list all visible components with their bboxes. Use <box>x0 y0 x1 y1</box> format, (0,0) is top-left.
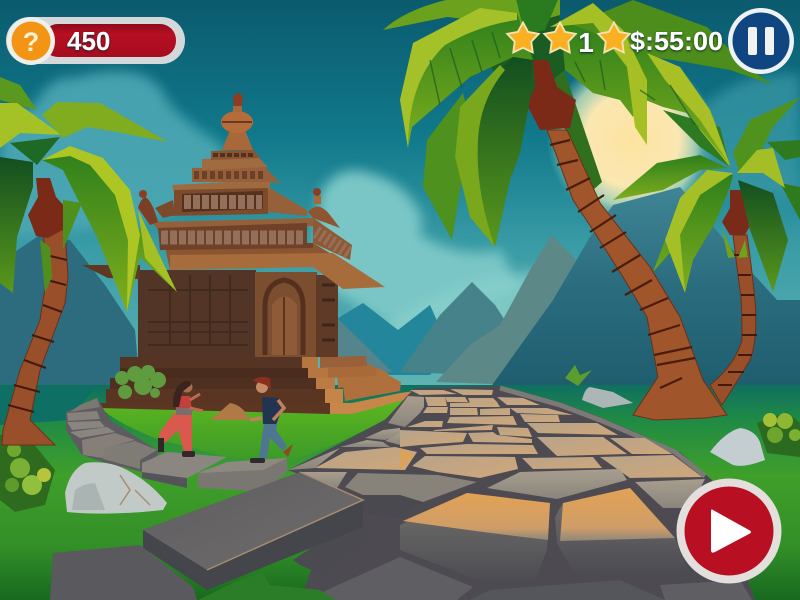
timer: $:55:00 <box>630 26 723 56</box>
distant plant <box>565 365 592 386</box>
small palm fronds <box>613 90 800 293</box>
temple eave <box>82 243 385 289</box>
help icon: ? <box>23 27 39 57</box>
path base <box>288 386 755 600</box>
score pill <box>6 17 185 65</box>
temple base steps <box>97 356 415 414</box>
star 2 <box>544 22 576 52</box>
slab bottom centre <box>305 557 473 600</box>
main stone path <box>288 386 755 600</box>
girl character <box>158 381 203 457</box>
big palm back fronds <box>383 0 773 190</box>
stepped temple <box>82 93 415 414</box>
mountains right <box>436 187 800 390</box>
small palm right <box>613 90 800 405</box>
large tile left <box>400 493 550 582</box>
large slab <box>143 472 363 590</box>
left palm fronds <box>0 77 177 312</box>
sun glow <box>547 55 717 225</box>
temple balustrade tier <box>152 218 352 260</box>
pause button <box>728 8 794 74</box>
slab bottom right <box>470 580 665 600</box>
distant path tiles <box>315 389 702 478</box>
middle tile block <box>345 473 477 518</box>
sky background <box>0 0 800 400</box>
big palm front fronds <box>400 0 730 247</box>
stone under slab <box>293 520 368 577</box>
grass ground <box>0 385 800 600</box>
score value: 450 <box>67 26 110 56</box>
boy character <box>250 377 293 463</box>
inner lawn <box>100 396 418 462</box>
bush by temple <box>115 365 166 399</box>
temple upper roof <box>155 150 307 218</box>
white boulder left <box>65 462 167 514</box>
left foreground plant <box>0 430 55 512</box>
star 3 <box>598 22 630 52</box>
right foreground plant <box>757 412 800 457</box>
curved stone edging <box>66 398 287 491</box>
temple walls <box>138 270 338 357</box>
mountains centre <box>335 282 508 375</box>
big palm right <box>383 0 773 420</box>
play button <box>676 478 782 584</box>
small palm trunk <box>710 190 757 405</box>
grey path tiles <box>288 396 705 508</box>
distant rock <box>582 387 633 408</box>
small roof finials <box>138 188 340 228</box>
rock right <box>710 428 765 466</box>
temple finial <box>221 93 253 150</box>
path edge band <box>500 388 705 476</box>
star 1 <box>507 22 539 52</box>
mountains left <box>0 235 140 388</box>
left palm trunk <box>2 178 68 445</box>
large tile right <box>555 488 688 572</box>
foreground grass tuft <box>198 572 335 600</box>
slab bottom left <box>50 545 197 600</box>
star count: 1 <box>578 27 594 58</box>
clouds <box>0 72 800 350</box>
path stones foreground <box>50 472 752 600</box>
help icon <box>7 17 55 65</box>
small boulder on lawn <box>210 403 250 420</box>
left palm <box>0 77 177 445</box>
big palm trunk <box>527 60 727 420</box>
